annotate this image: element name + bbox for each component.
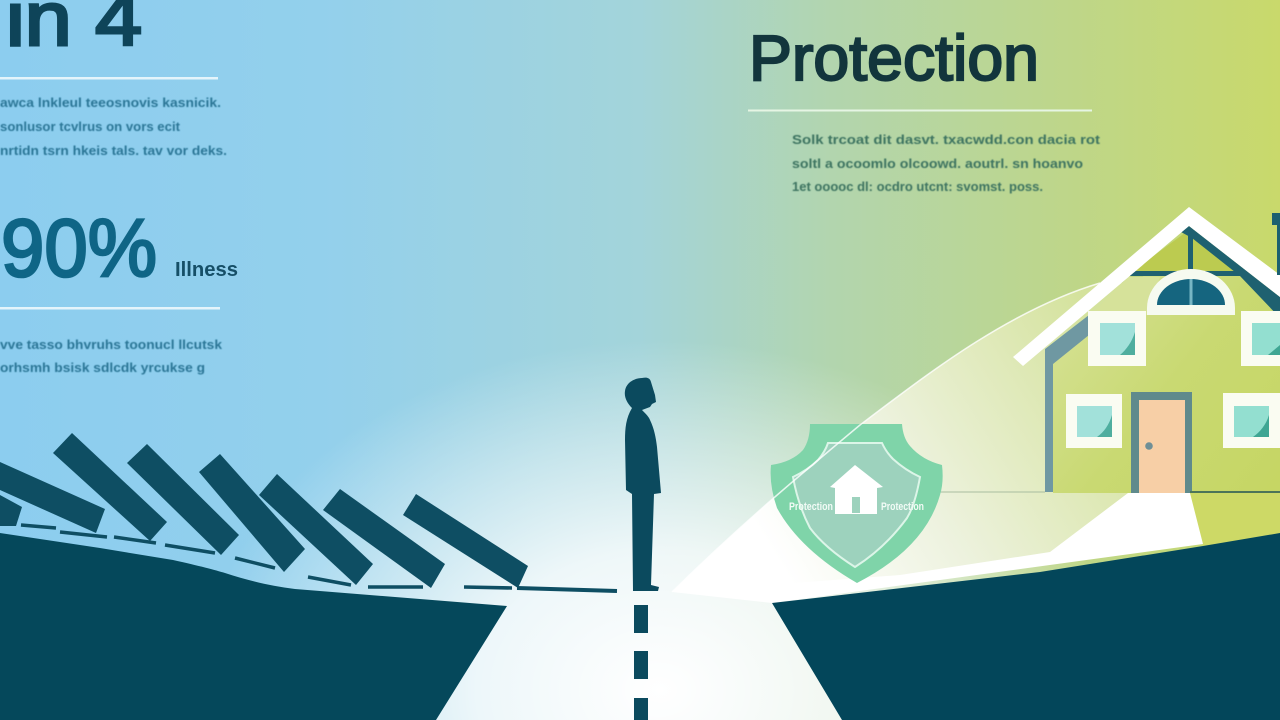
lawn right of path — [1190, 493, 1280, 546]
paragraph: lower left — [0, 337, 223, 375]
shield outer — [771, 424, 943, 583]
window upper right — [1241, 311, 1280, 366]
paragraph: right: 1et ooooc dl: ocdro utcnt: svomst. poss. — [792, 179, 1043, 194]
left column text — [0, 0, 238, 375]
paragraph: top left — [0, 95, 227, 158]
label: Illness: Illness — [175, 259, 238, 281]
heading: Protection: Protection — [749, 22, 1039, 94]
door — [1131, 392, 1192, 493]
domino 2 — [0, 462, 105, 533]
white path — [700, 493, 1203, 603]
window lower right — [1223, 393, 1280, 448]
domino 8 — [403, 494, 528, 588]
window upper left — [1088, 311, 1146, 366]
light beam hill behind house — [672, 283, 1140, 603]
paragraph: lower left: vve tasso bhvruhs toonucl llcutsk — [0, 337, 223, 352]
falling dominoes — [0, 433, 528, 588]
paragraph: right: Solk trcoat dit dasvt. txacwdd.con dacia rot — [792, 132, 1101, 147]
roof — [1013, 207, 1280, 366]
chimney — [1272, 213, 1280, 275]
truss — [1130, 226, 1280, 318]
paragraph: lower left: orhsmh bsisk sdlcdk yrcukse g — [0, 360, 205, 375]
shield icon — [771, 424, 943, 583]
ground line — [1190, 491, 1280, 494]
paragraph: right: soltl a ocoomlo olcoowd. aoutrl. sn hoanvo — [792, 156, 1083, 171]
domino 3 — [53, 433, 167, 541]
statistic: 90%: 90% — [1, 203, 157, 294]
paragraph: top left: sonlusor tcvlrus on vors ecit — [0, 119, 181, 134]
side post — [1045, 315, 1089, 492]
paragraph: top left: awca lnkleul teeosnovis kasnicik. — [0, 95, 221, 110]
domino 7 — [323, 489, 445, 588]
gable triangle — [1130, 230, 1248, 273]
left cliff — [0, 533, 507, 720]
shield label right: Protection — [881, 501, 924, 513]
house wall — [1053, 232, 1280, 493]
shield inner — [793, 443, 920, 567]
window lower left — [1066, 394, 1122, 448]
house — [940, 207, 1280, 494]
dashed centre line — [634, 605, 648, 720]
paragraph: right — [792, 132, 1101, 194]
paragraph: top left: nrtidn tsrn hkeis tals. tav vor deks. — [0, 143, 227, 158]
right column text — [748, 22, 1101, 194]
arched window — [1147, 269, 1235, 315]
domino 5 — [199, 454, 305, 572]
beam edge highlight — [672, 283, 1100, 592]
shield house — [830, 465, 883, 514]
domino 4 — [127, 444, 239, 555]
right cliff — [772, 533, 1280, 720]
bottom centre light glow — [190, 330, 1130, 720]
shield door — [852, 497, 860, 513]
domino 6 — [259, 474, 373, 585]
shield label left: Protection — [789, 501, 833, 513]
upper wall shade — [1088, 277, 1160, 318]
domino 1 — [0, 495, 22, 526]
person silhouette — [625, 378, 661, 591]
domino ground shadows — [21, 525, 617, 591]
